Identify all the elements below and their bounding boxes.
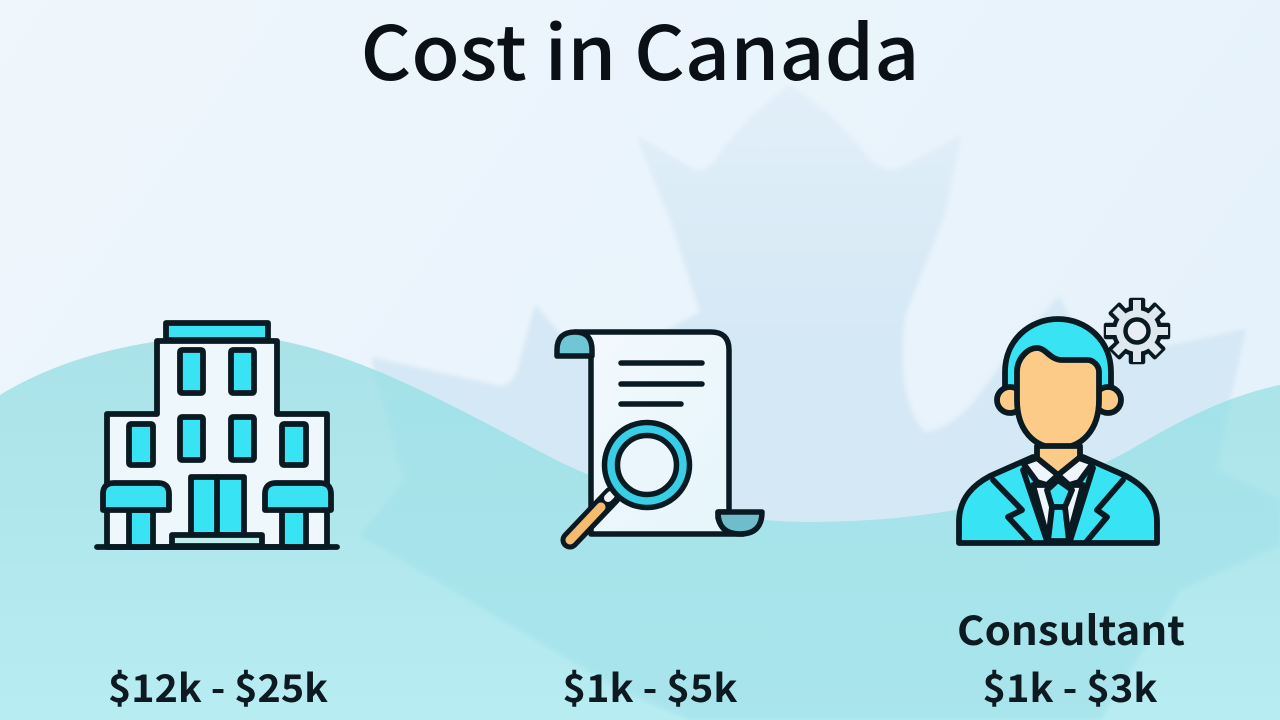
icon: gear <box>1106 300 1168 362</box>
icon: hotel building <box>97 323 337 547</box>
price: consultant: $1k - $3k <box>982 658 1158 713</box>
icon: consultant with gear <box>959 300 1168 543</box>
price: building: $12k - $25k <box>108 658 328 713</box>
maple leaf watermark <box>360 84 1280 720</box>
teal wave <box>0 336 1280 720</box>
icon: document with magnifier <box>557 332 762 540</box>
price: document: $1k - $5k <box>562 658 738 713</box>
label: consultant: Consultant <box>957 599 1185 657</box>
maple leaf over wave <box>364 372 1278 720</box>
